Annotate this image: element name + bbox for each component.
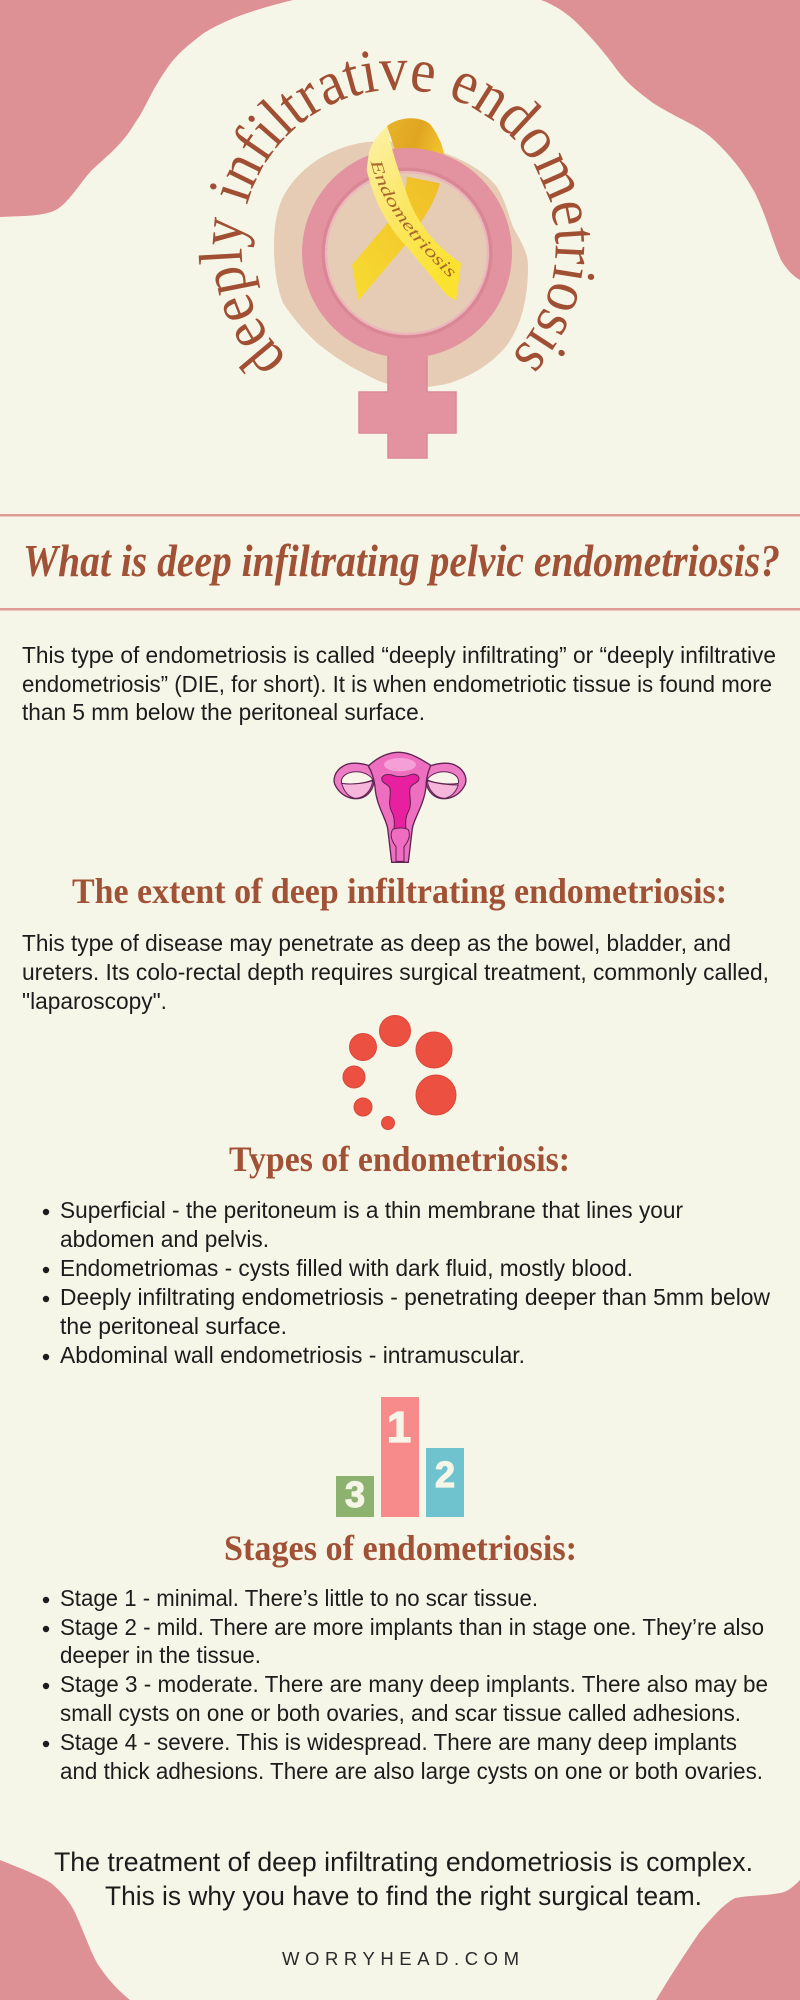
intro paragraph [22,642,776,725]
blob: bottom right corner [656,1880,800,2000]
closing statement: This is why you have to find the right surgical team. [105,1881,702,1911]
section heading: stages: Stages of endometriosis: [224,1528,577,1568]
ribbon left tail [352,177,440,301]
extent paragraph [22,930,769,1014]
ribbon back loop [387,118,444,165]
icon: red dots [343,1016,456,1130]
podium digits: 1 [387,1403,411,1452]
hero emblem: female symbol with ribbon [274,118,528,459]
intro paragraph: This type of endometriosis is called “deeply infiltrating” or “deeply infiltrative [22,642,776,668]
stages list: Stage 3 - moderate. There are many deep implants. There also may be [60,1671,768,1697]
blob: bottom left corner [0,1860,130,2000]
ribbon label: Endometriosis [370,161,455,276]
uterine highlight [384,758,416,771]
extent paragraph: "laparoscopy". [22,988,167,1014]
podium digits: 2 [435,1454,455,1495]
left tube and ovary [334,763,374,799]
section heading: extent: The extent of deep infiltrating endometriosis: [72,871,727,911]
types list: Endometriomas - cysts filled with dark fluid, mostly blood. [60,1255,633,1281]
podium digits: 3 [345,1474,365,1515]
cervix [391,828,409,861]
stages list: deeper in the tissue. [60,1642,261,1668]
podium 1 [381,1397,419,1517]
closing statement: The treatment of deep infiltrating endometriosis is complex. [54,1847,753,1877]
podium 3 [336,1476,374,1517]
intro paragraph: than 5 mm below the peritoneal surface. [22,699,425,725]
types list: Abdominal wall endometriosis - intramuscular. [60,1342,525,1368]
blob: top left corner [0,0,293,217]
intro paragraph: endometriosis” (DIE, for short). It is when endometriotic tissue is found more [22,671,772,697]
stages list: small cysts on one or both ovaries, and scar tissue called adhesions. [60,1700,741,1726]
stages list [43,1585,768,1784]
symbol ring [314,160,500,346]
icon: uterus [334,752,466,862]
band top rule [0,514,800,516]
female symbol [314,160,500,458]
types list: Deeply infiltrating endometriosis - penetrating deeper than 5mm below [60,1284,771,1310]
ribbon front band [367,126,461,301]
podium digits [345,1403,455,1515]
symbol stem and cross [359,345,456,458]
closing statement [54,1847,753,1911]
stages list: and thick adhesions. There are also large cysts on one or both ovaries. [60,1758,763,1784]
uterine cavity [382,774,419,829]
icon: podium [336,1397,464,1517]
stages list: Stage 2 - mild. There are more implants than in stage one. They’re also [60,1614,764,1640]
curved title: deeply infiltrative endometriosis [198,51,594,374]
uterus body [368,752,431,862]
extent paragraph: This type of disease may penetrate as deep as the bowel, bladder, and [22,930,731,956]
yellow awareness ribbon [352,126,461,300]
section heading: types: Types of endometriosis: [229,1139,570,1179]
blob: top right corner [541,0,800,280]
types list: the peritoneal surface. [60,1313,287,1339]
types list: Superficial - the peritoneum is a thin membrane that lines your [60,1197,683,1223]
stages list: Stage 4 - severe. This is widespread. There are many deep implants [60,1729,737,1755]
footer website: WORRYHEAD.COM [282,1948,519,1969]
types list: abdomen and pelvis. [60,1226,269,1252]
types list [43,1197,771,1368]
beige blob behind symbol [274,141,528,387]
band bottom rule [0,608,800,610]
right tube and ovary [426,763,466,799]
extent paragraph: ureters. Its colo-rectal depth requires surgical treatment, commonly called, [22,959,769,985]
stages list: Stage 1 - minimal. There’s little to no scar tissue. [60,1585,538,1611]
podium 2 [426,1448,464,1517]
